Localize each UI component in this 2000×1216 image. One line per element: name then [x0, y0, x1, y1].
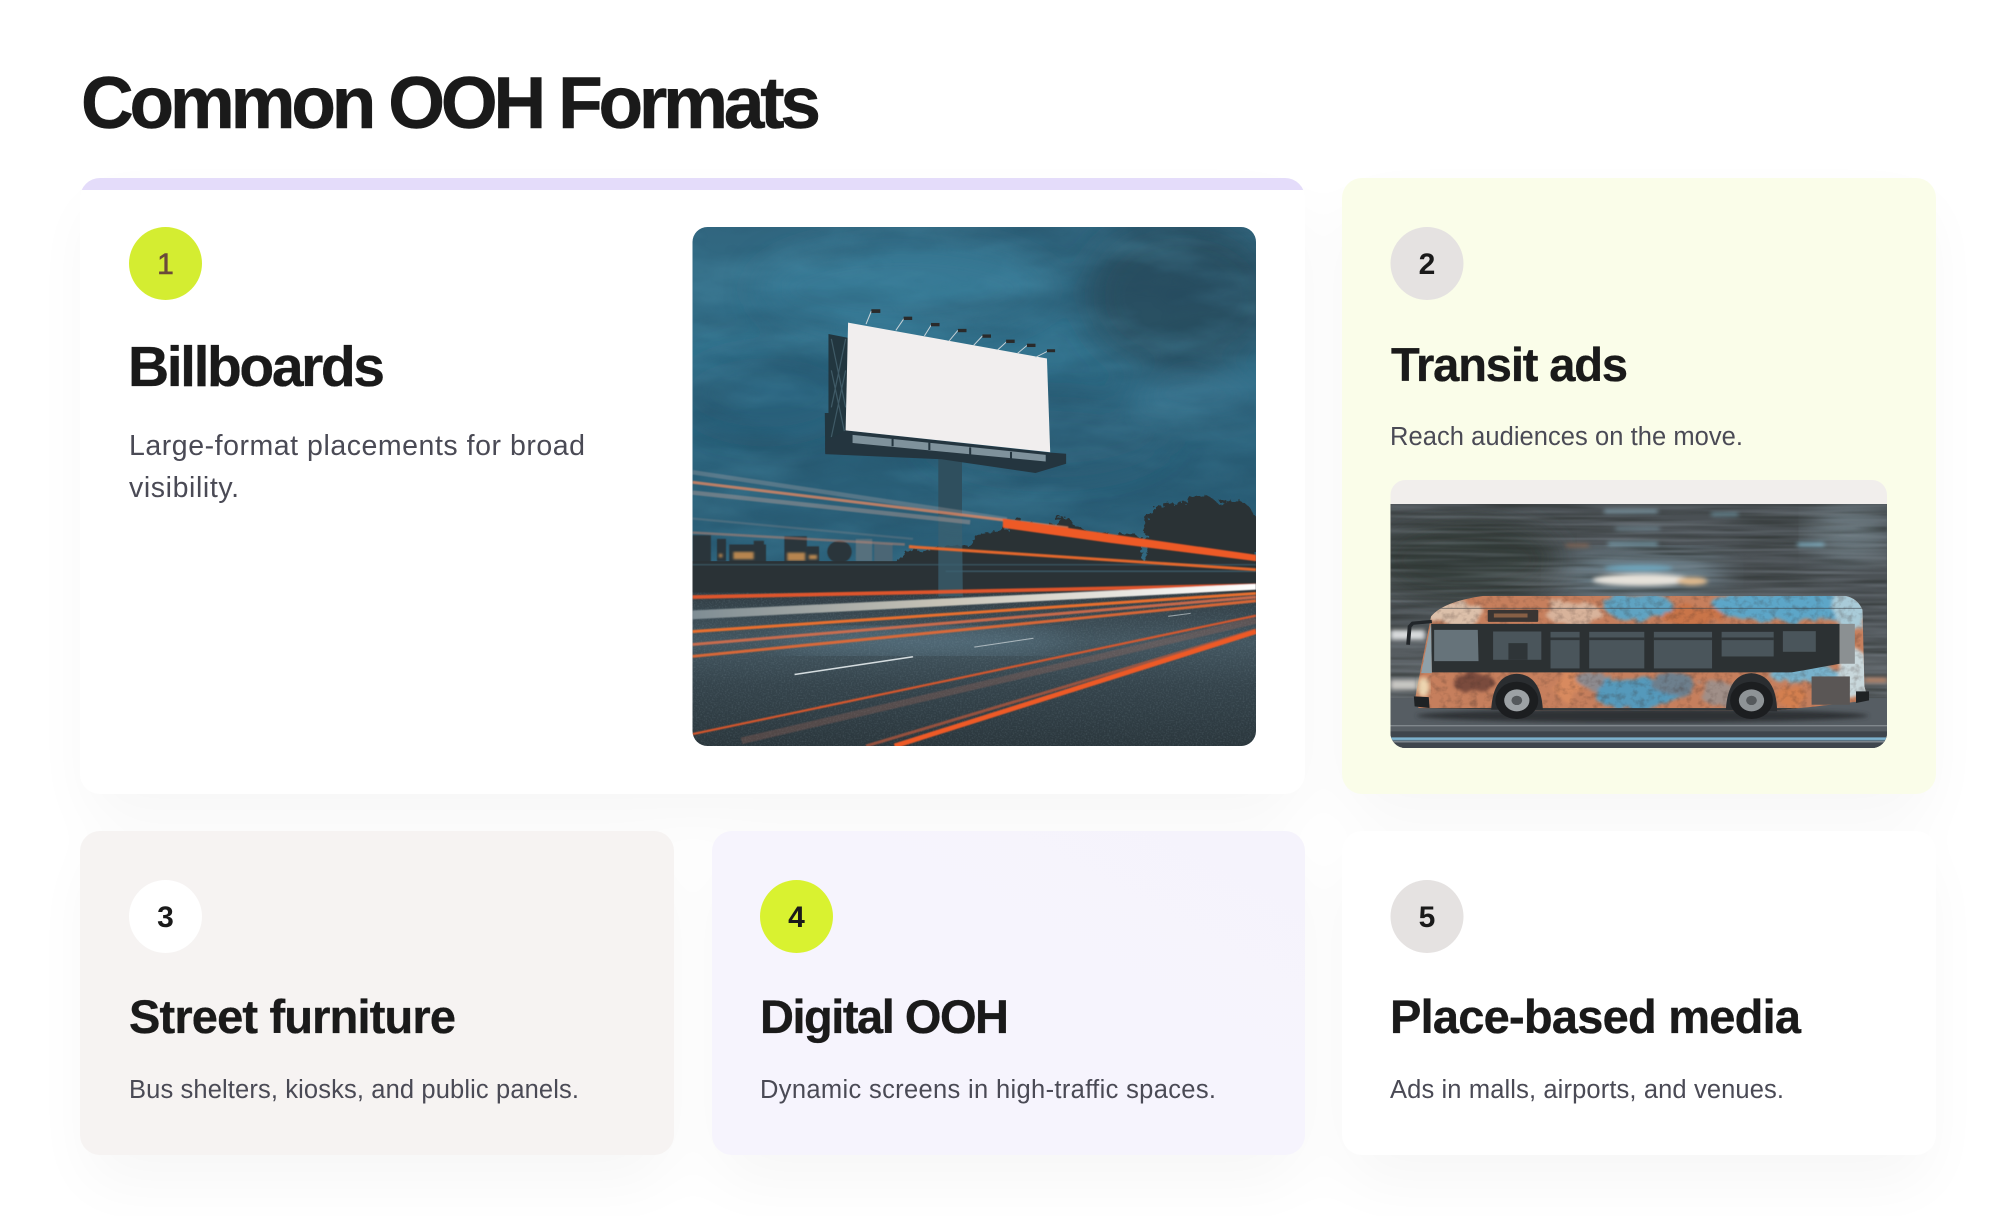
description: Place-based media: Ads in malls, airports, and venues. [1390, 1076, 1784, 1104]
number badge 4 [760, 880, 833, 953]
billboard face [846, 323, 1050, 452]
card background [1342, 831, 1936, 1155]
mirror and front [1408, 622, 1432, 645]
tree line [896, 494, 1256, 562]
description: Transit ads: Reach audiences on the move. [1390, 423, 1743, 451]
image: wrapped bus in motion [1374, 480, 1891, 748]
number badge 4: 4 [788, 901, 805, 934]
light trails [692, 472, 1256, 746]
pole [938, 457, 962, 515]
description: Billboards: visibility. [129, 472, 239, 504]
road [1390, 698, 1887, 748]
window band [1431, 624, 1840, 672]
heading: Digital OOH: Digital OOH [760, 990, 1009, 1043]
number badge 2 [1390, 227, 1464, 300]
heading: Street furniture: Street furniture [129, 990, 456, 1043]
card background [712, 831, 1305, 1155]
panel: Transit ads [1342, 178, 1936, 794]
description: Billboards [129, 430, 585, 504]
heading: Transit ads: Transit ads [1391, 338, 1628, 391]
card background [80, 831, 674, 1155]
panel: Digital OOH [712, 831, 1305, 1155]
road dashes [795, 613, 1191, 675]
image: billboard at dusk over highway [676, 218, 1280, 746]
lamps [866, 311, 1048, 357]
card background [80, 178, 1305, 794]
number badge 1: 1 [157, 248, 174, 281]
card shadows [85, 205, 1931, 1185]
number badge 1 [129, 227, 202, 300]
embankment [692, 561, 1256, 594]
wheels [1491, 673, 1777, 719]
heading: Place-based media: Place-based media [1390, 990, 1802, 1043]
heading: Billboards: Billboards [128, 335, 385, 399]
number badge 3 [129, 880, 202, 953]
card background [1342, 178, 1936, 794]
billboard back frame [825, 334, 848, 453]
road [692, 593, 1256, 746]
skyline [692, 535, 893, 563]
panel: Place-based media [1342, 831, 1936, 1155]
panel: Street furniture [80, 831, 674, 1155]
number badge 2: 2 [1419, 248, 1435, 281]
bus body [1413, 590, 1872, 713]
description: Digital OOH: Dynamic screens in high-traffic spaces. [760, 1076, 1216, 1104]
description: Street furniture: Bus shelters, kiosks, and public panels. [129, 1076, 579, 1104]
panel: Billboards [80, 178, 1305, 794]
description: Billboards: Large-format placements for broad [129, 430, 585, 462]
number badge 5 [1390, 880, 1464, 953]
title: Common OOH Formats [81, 63, 821, 144]
number badge 3: 3 [157, 901, 174, 934]
number badge 5: 5 [1419, 901, 1435, 934]
destination sign [1488, 610, 1538, 622]
